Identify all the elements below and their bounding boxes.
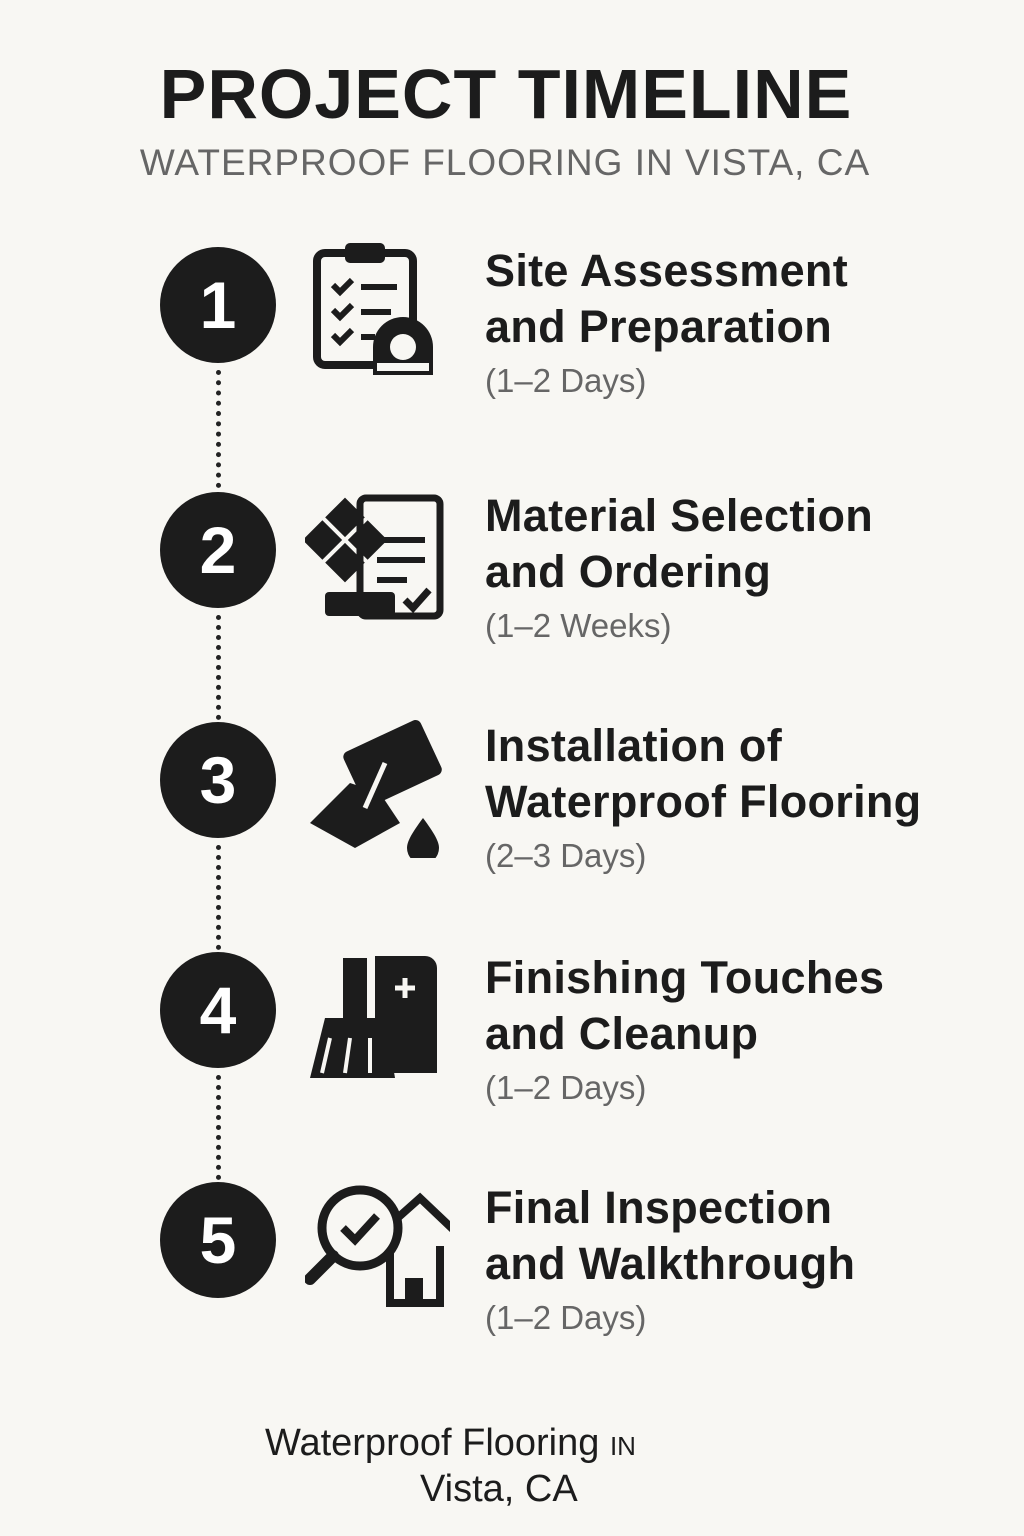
step 4 text: (1–2 Days) bbox=[485, 1069, 646, 1106]
step 1 text: (1–2 Days) bbox=[485, 362, 646, 399]
dotted connector 4-5 bbox=[216, 1075, 226, 1180]
step 2 number bbox=[160, 492, 276, 608]
icon: tiles and order form bbox=[305, 494, 444, 620]
dotted connector 3-4 bbox=[216, 845, 226, 950]
subtitle: WATERPROOF FLOORING IN VISTA, CA bbox=[140, 142, 870, 183]
step 3 text bbox=[485, 720, 921, 874]
footer line 1: Waterproof Flooring IN bbox=[265, 1422, 636, 1464]
step 4 text bbox=[485, 952, 884, 1106]
step 5 number: 5 bbox=[200, 1203, 236, 1277]
step 2 text: (1–2 Weeks) bbox=[485, 607, 671, 644]
icon: clipboard with tape measure bbox=[313, 243, 433, 375]
dotted connector 1-2 bbox=[216, 370, 226, 488]
step 3 text: (2–3 Days) bbox=[485, 837, 646, 874]
icon: hand with trowel and drop bbox=[310, 720, 442, 858]
title: PROJECT TIMELINE bbox=[160, 55, 852, 133]
step 5 text: and Walkthrough bbox=[485, 1238, 855, 1289]
step 4 text: and Cleanup bbox=[485, 1008, 758, 1059]
dotted connector 2-3 bbox=[216, 615, 226, 720]
step 3 text: Installation of bbox=[485, 720, 782, 771]
step 1 number bbox=[160, 247, 276, 363]
icon: brush and bottle bbox=[310, 956, 437, 1078]
step 1 text: Site Assessment bbox=[485, 245, 848, 296]
step 3 number bbox=[160, 722, 276, 838]
footer line 2: Vista, CA bbox=[420, 1468, 578, 1510]
step 5 text: Final Inspection bbox=[485, 1182, 832, 1233]
icon: magnifier with house bbox=[305, 1186, 450, 1307]
step 2 text: and Ordering bbox=[485, 546, 771, 597]
step 2 text: Material Selection bbox=[485, 490, 873, 541]
step 1 text: and Preparation bbox=[485, 301, 832, 352]
step 2 text bbox=[485, 490, 873, 644]
step 5 text: (1–2 Days) bbox=[485, 1299, 646, 1336]
step 3 text: Waterproof Flooring bbox=[485, 776, 921, 827]
step 4 number: 4 bbox=[200, 973, 236, 1047]
step 3 number: 3 bbox=[200, 743, 236, 817]
step 5 number bbox=[160, 1182, 276, 1298]
step 2 number: 2 bbox=[200, 513, 236, 587]
step 4 text: Finishing Touches bbox=[485, 952, 884, 1003]
step 1 number: 1 bbox=[200, 268, 236, 342]
step 4 number bbox=[160, 952, 276, 1068]
step 1 text bbox=[485, 245, 848, 399]
step 5 text bbox=[485, 1182, 855, 1336]
